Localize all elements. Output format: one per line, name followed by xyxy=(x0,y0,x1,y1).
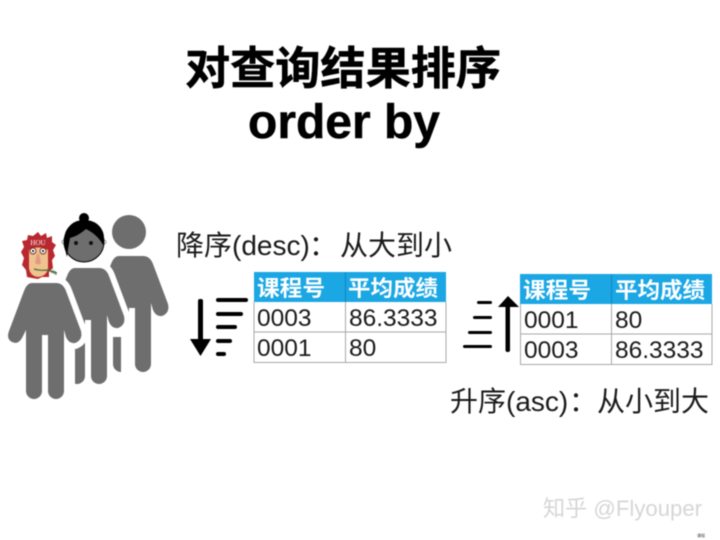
icon: descending sort xyxy=(190,298,248,356)
table: ascending: 86.3333 xyxy=(615,337,704,364)
icon: monkey head xyxy=(21,232,57,279)
heading: ascending: ： xyxy=(569,380,597,420)
icon: queue of people xyxy=(8,213,168,399)
person: back xyxy=(95,215,168,385)
title xyxy=(185,43,501,149)
table: descending: 86.3333 xyxy=(349,305,438,332)
table: descending xyxy=(254,272,446,362)
table: descending: 0001 xyxy=(257,335,312,362)
table: descending: 0003 xyxy=(257,305,312,332)
heading: ascending: 从小到大 xyxy=(597,386,709,417)
table: ascending: 80 xyxy=(615,307,642,334)
table: ascending: 课程号 xyxy=(523,278,591,303)
table: descending: 课程号 xyxy=(257,276,325,301)
title: order by xyxy=(248,96,440,149)
icon: ascending sort xyxy=(463,296,519,352)
title: 对查询结果排序 xyxy=(185,43,501,94)
table: descending: 80 xyxy=(349,335,376,362)
page mark: 课程 xyxy=(697,532,705,538)
table: ascending: 0003 xyxy=(524,337,579,364)
heading: descending: 从大到小 xyxy=(340,230,452,261)
person: front xyxy=(8,283,81,399)
watermark: 知乎 @Flyouper xyxy=(543,496,702,521)
heading: ascending: 升序(asc) xyxy=(450,386,568,417)
table: ascending xyxy=(520,274,712,364)
table: ascending: 0001 xyxy=(524,307,579,334)
table: descending: 平均成绩 xyxy=(348,276,438,301)
icon: monkey head: HOU xyxy=(30,239,46,247)
table: ascending: 平均成绩 xyxy=(615,278,705,303)
heading: descending: 降序(desc) xyxy=(176,230,310,261)
person: middle xyxy=(51,213,124,392)
heading: descending: ： xyxy=(309,224,337,264)
